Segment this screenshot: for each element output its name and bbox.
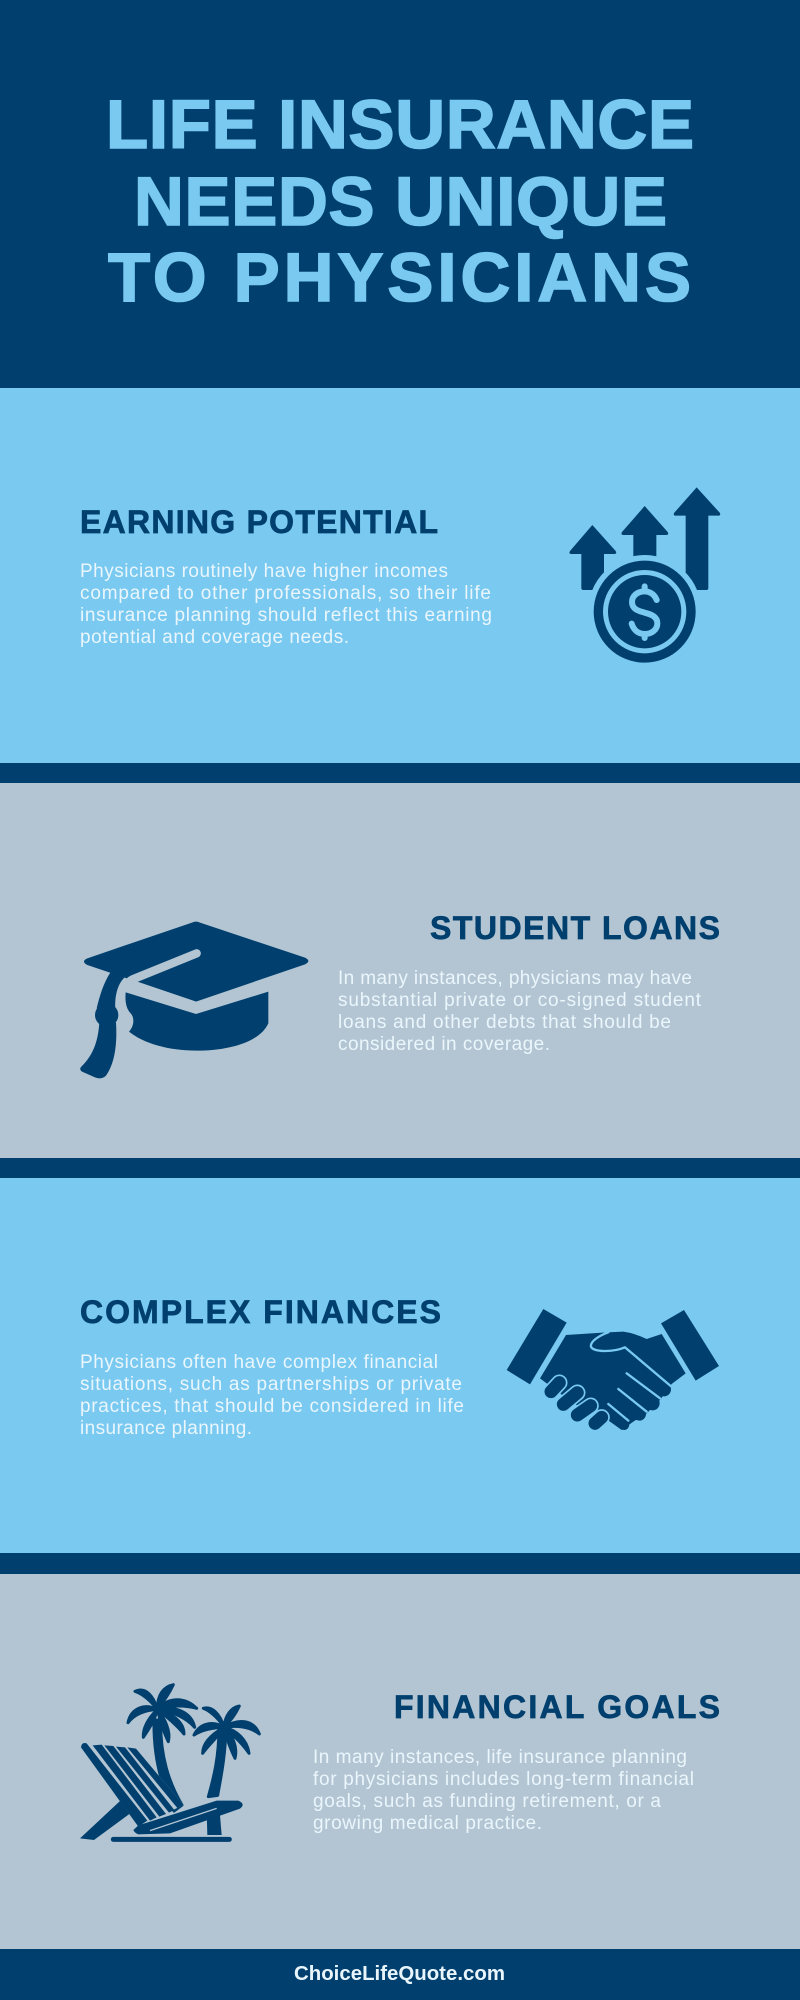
text block: earning potential: potential and coverage needs. (80, 627, 349, 648)
header panel (0, 0, 800, 388)
text block: student loans (338, 968, 702, 1055)
panel: earning potential (0, 388, 800, 763)
title: LIFE INSURANCE (106, 86, 694, 163)
text block: financial goals: growing medical practice. (313, 1813, 542, 1834)
title: TO PHYSICIANS (108, 239, 691, 316)
icon: handshake (507, 1309, 719, 1430)
text block: earning potential: insurance planning should reflect this earning (80, 605, 492, 626)
text block: student loans: substantial private or co-signed student (338, 990, 702, 1011)
title: NEEDS UNIQUE (134, 163, 667, 240)
text block: student loans: considered in coverage. (338, 1034, 550, 1055)
text block: complex finances: practices, that should be considered in life (80, 1396, 464, 1417)
footer text: ChoiceLifeQuote.com (294, 1963, 505, 1985)
text block: financial goals: In many instances, life insurance planning (313, 1747, 687, 1768)
heading: earning potential: EARNING POTENTIAL (80, 504, 438, 540)
text block: complex finances (80, 1352, 464, 1439)
text block: student loans: loans and other debts that should be (338, 1012, 671, 1033)
icon: beach chair and palm trees (80, 1685, 259, 1840)
heading: student loans: STUDENT LOANS (430, 910, 720, 946)
icon: rising arrows and dollar coin (569, 487, 720, 668)
title (106, 86, 694, 316)
panel: student loans (0, 783, 800, 1158)
text block: earning potential: Physicians routinely have higher incomes (80, 561, 448, 582)
divider band (0, 763, 800, 783)
icon: graduation cap (80, 922, 308, 1078)
footer (0, 1949, 800, 2000)
heading: complex finances: COMPLEX FINANCES (80, 1294, 441, 1330)
text block: earning potential (80, 561, 492, 648)
panel: financial goals (0, 1574, 800, 1949)
divider band (0, 1553, 800, 1574)
text block: student loans: In many instances, physicians may have (338, 968, 692, 989)
panel: complex finances (0, 1178, 800, 1553)
heading: financial goals: FINANCIAL GOALS (394, 1689, 720, 1725)
text block: complex finances: insurance planning. (80, 1418, 252, 1439)
text block: financial goals: for physicians includes long-term financial (313, 1769, 694, 1790)
text block: financial goals (313, 1747, 694, 1834)
text block: complex finances: Physicians often have complex financial (80, 1352, 438, 1373)
divider band (0, 1158, 800, 1178)
text block: financial goals: goals, such as funding retirement, or a (313, 1791, 661, 1812)
text block: earning potential: compared to other professionals, so their life (80, 583, 491, 604)
text block: complex finances: situations, such as partnerships or private (80, 1374, 462, 1395)
